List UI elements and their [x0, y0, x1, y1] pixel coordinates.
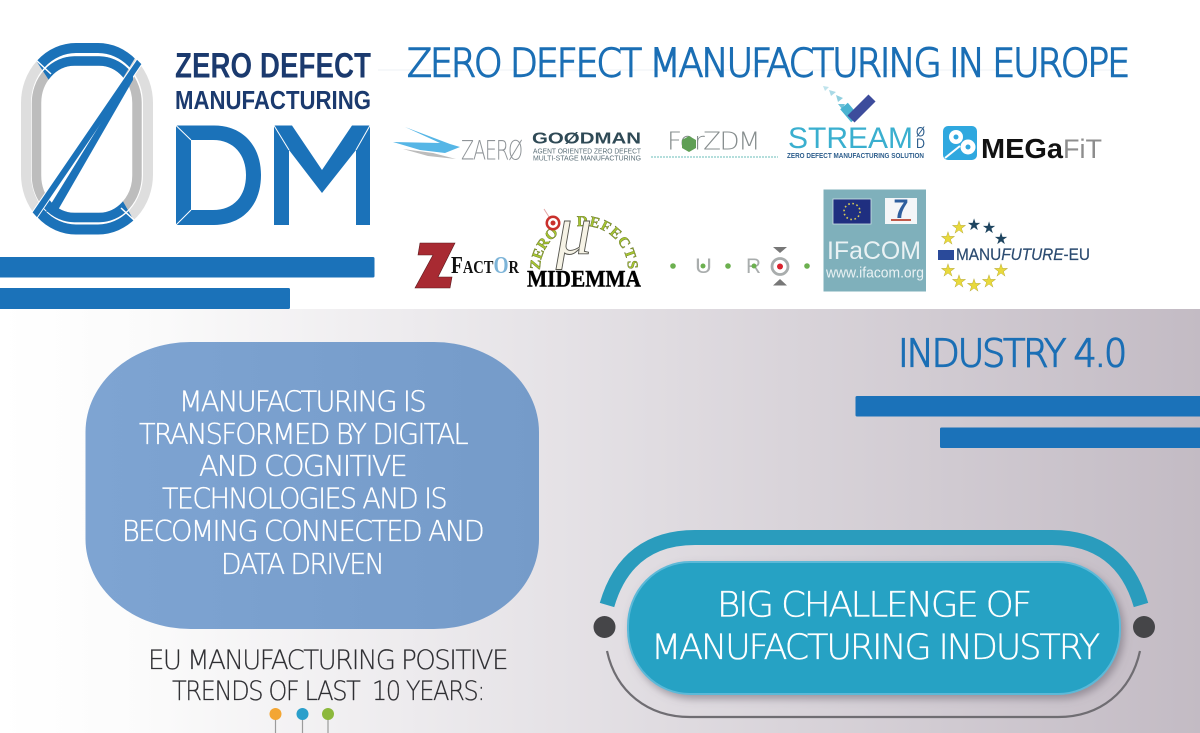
logo: IFaCOM: [824, 190, 926, 292]
panel text: TECHNOLOGIES AND IS: [162, 482, 446, 516]
logo: STREAM0D: [787, 86, 925, 160]
logo: MIDEMMA: MIDEMMA: [527, 266, 641, 292]
logo: zero defect manufacturing: [26, 46, 371, 230]
heading: EU manufacturing trends: TRENDS OF LAST 10 YEARS:: [172, 676, 484, 707]
logo: IFaCOM: IFaCOM: [827, 237, 921, 265]
background: lower section: [0, 309, 1200, 733]
logo: MIDEMMA: μ: [555, 190, 592, 270]
panel text: [122, 386, 483, 581]
panel text: BIG CHALLENGE OF: [717, 586, 1030, 626]
panel text: [651, 586, 1100, 668]
logo: MANUFUTURE-EU: ★: [967, 215, 981, 234]
logo: MANUFUTURE-EU: ★: [940, 229, 956, 249]
logo: ForZDM: [651, 126, 778, 157]
icon: EU flag: [833, 199, 871, 224]
logo: MANUFUTURE-EU: ★: [940, 261, 956, 281]
heading: EU manufacturing trends: [148, 645, 507, 707]
industry accent bars: [856, 396, 1200, 448]
icon: target: [544, 209, 560, 230]
logo: MEGaFiT: FiT: [1063, 134, 1102, 164]
logo: MANUFUTURE-EU: ★: [951, 272, 967, 292]
logo: ZFactOr: [415, 243, 520, 288]
heading: Industry 4.0: INDUSTRY 4.0: [898, 332, 1125, 376]
logo: GOODMAN: [532, 130, 641, 162]
curved text: defects: DEFECTS: [576, 216, 638, 269]
logo text: zero defect: ZERO DEFECT: [175, 46, 371, 86]
panel text: BECOMING CONNECTED AND: [122, 515, 483, 548]
timeline markers: [270, 708, 334, 733]
logo: MEGaFiT: [943, 126, 1102, 164]
logo: MANUFUTURE-EU: ★: [981, 272, 997, 292]
logo: MIDEMMA: [527, 190, 641, 292]
logo letter: D: [176, 126, 261, 225]
logo: URO: [670, 247, 810, 286]
logo: MANUFUTURE-EU: ★: [966, 276, 982, 296]
panel text: MANUFACTURING INDUSTRY: [651, 628, 1100, 668]
logo accent bars: [0, 257, 374, 309]
logo: STREAM0D: STREAM: [788, 122, 913, 155]
logo: MANUFUTURE-EU: [938, 215, 1090, 296]
panel text: AND COGNITIVE: [199, 450, 406, 483]
panel text: MANUFACTURING IS: [179, 386, 425, 418]
arc: bottom thin: [607, 651, 1140, 717]
logo: ForZDM: ForZDM: [667, 126, 759, 156]
logo: MANUFUTURE-EU: ★: [993, 261, 1009, 281]
logo: MANUFUTURE-EU: ★: [982, 218, 996, 237]
logo: STREAM0D: Ø: [916, 124, 925, 140]
icon: gears: [943, 126, 977, 160]
icon: checkmark with scattered triangles: [823, 86, 872, 119]
logo: ZAERO: ZAERØ: [461, 136, 522, 166]
panel text: TRANSFORMED BY DIGITAL: [139, 418, 468, 451]
logo: ZAERO: [393, 127, 522, 166]
logo: URO: U: [695, 255, 712, 278]
curved text: zero: ZERO: [530, 229, 557, 270]
heading: EU manufacturing trends: EU MANUFACTURING POSITIVE: [148, 645, 507, 676]
logo: MEGaFiT: MEGa: [981, 133, 1063, 164]
logo: MANUFUTURE-EU: MANUFUTURE-EU: [956, 246, 1090, 264]
panel: big challenge: [628, 562, 1120, 694]
panel: manufacturing transformed: [86, 342, 539, 629]
dot: right: [1133, 616, 1155, 638]
title: ZERO DEFECT MANUFACTURING IN EUROPE: [407, 42, 1128, 86]
logo: MANUFUTURE-EU: ★: [994, 229, 1008, 248]
logo: STREAM0D: D: [916, 135, 925, 151]
logo: MANUFUTURE-EU: ★: [951, 218, 967, 238]
logo: IFaCOM: www.ifacom.org: [825, 264, 924, 282]
arc: top teal: [607, 538, 1141, 605]
logo: URO: R: [746, 255, 761, 278]
logo letter: M: [274, 126, 370, 225]
logo: GOODMAN: GOØDMAN: [532, 130, 641, 148]
logo text: manufacturing: MANUFACTURING: [175, 87, 371, 115]
logo: ZFactOr: FACTOR: [451, 253, 520, 279]
icon: slashed zero: [26, 48, 148, 230]
logo: GOODMAN: AGENT ORIENTED ZERO DEFECT: [533, 146, 641, 156]
icon: FP7 badge: 7: [893, 194, 909, 224]
logo: GOODMAN: MULTI-STAGE MANUFACTURING: [533, 154, 641, 162]
logo: STREAM0D: ZERO DEFECT MANUFACTURING SOLUTION: [787, 151, 924, 160]
panel text: DATA DRIVEN: [221, 548, 383, 581]
dot: left: [594, 616, 616, 638]
